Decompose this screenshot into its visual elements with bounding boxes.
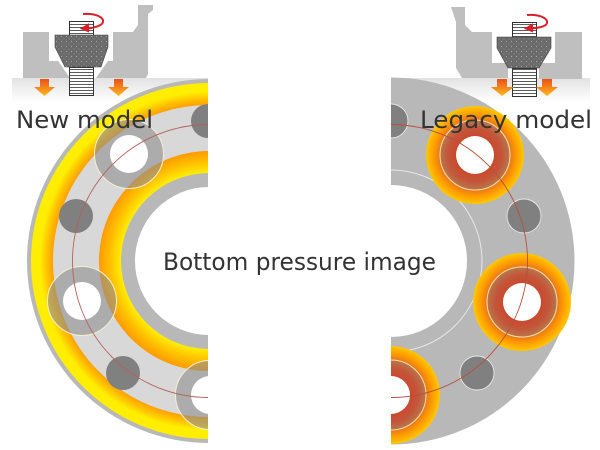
bolt circle line [391,124,528,398]
bolt upper thread [512,22,536,38]
pressure arrow right [536,79,558,96]
flange section [23,5,153,78]
bolt circle line [72,124,208,398]
dark bolt circles [59,104,208,390]
outer gray edge [27,79,208,443]
pressure fade band [391,78,590,102]
bolt lower thread [70,68,94,96]
chart: legacy model pressure half ring [391,78,574,444]
pressure arrow right [108,79,129,96]
pressure halos [391,106,571,444]
bolt lower thread [512,68,536,96]
rotation arrow [526,15,547,31]
thin inner line [391,170,482,350]
inner pressure band [99,151,208,371]
center opening [391,185,467,337]
outer pressure band [31,83,208,439]
label: new model: New model [16,106,153,134]
pressure arrow left [491,79,514,96]
dark bolt circles [374,104,541,390]
pressure fade band [12,78,208,102]
panel: legacy model cross-section [391,7,590,102]
washer outlines [391,120,558,430]
center opening [135,187,208,335]
panel: new model cross-section [12,5,208,102]
washers [47,119,208,430]
rotation arrow [82,14,103,31]
light flange face [53,105,208,417]
flange face [391,78,574,444]
chart: new model pressure half ring [27,79,208,443]
nut [55,35,108,67]
bolt holes [63,135,208,414]
inner gray ring [121,173,208,349]
pressure arrow left [34,79,55,96]
label: legacy model: Legacy model [420,106,592,134]
bolt upper thread [70,22,94,36]
flange section [451,7,582,79]
bolt holes [391,136,541,414]
nut [497,37,551,68]
title: bottom pressure image: Bottom pressure image [163,248,436,276]
